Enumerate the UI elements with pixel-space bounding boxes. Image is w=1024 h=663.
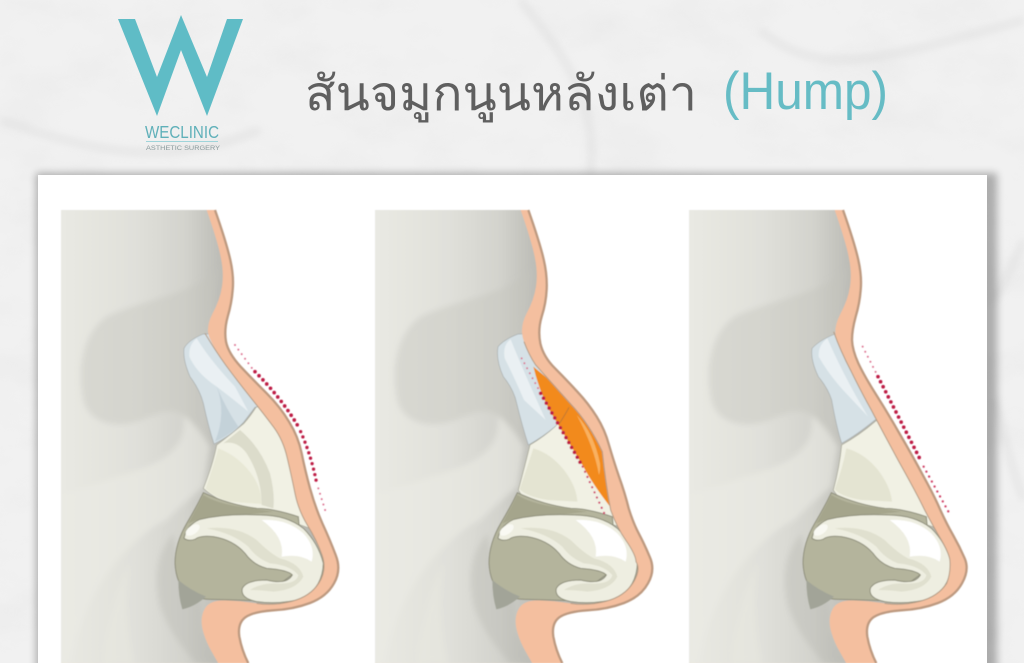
logo wordmark: WECLINIC [145, 122, 219, 142]
skin outline [528, 210, 652, 663]
logo rule [146, 141, 218, 142]
internal structures [709, 298, 950, 658]
inner skin line [834, 332, 950, 604]
nostril and alar cartilage [175, 493, 323, 609]
inner skin line [205, 333, 324, 604]
face interior [375, 210, 638, 663]
skin fill [375, 210, 652, 663]
panel: nose before, with hump [61, 210, 338, 663]
logo mark: W [118, 15, 243, 116]
logo: WeClinic [118, 15, 243, 152]
dotted line: hump curve [235, 345, 327, 515]
face interior [689, 210, 950, 663]
white card panel [38, 175, 987, 663]
internal structures [395, 298, 638, 657]
nasal bone [811, 334, 876, 444]
cartilage [832, 421, 933, 526]
title: Thai text: สันจมูกนูนหลังเต่า [305, 68, 697, 123]
panel: nose during, hump marked for removal [375, 210, 652, 663]
inner skin line [524, 342, 638, 604]
face shading [395, 298, 524, 657]
dotted line: straight profile [863, 347, 949, 513]
internal structures [81, 298, 324, 658]
dotted line: cut line [522, 358, 605, 515]
skin fill [689, 210, 967, 663]
logo tagline: ASTHETIC SURGERY [146, 146, 220, 152]
orange hump area [533, 367, 614, 512]
nasal bone [183, 334, 258, 444]
face shading [709, 298, 838, 658]
card shadow [36, 173, 997, 663]
nostril and alar cartilage [803, 493, 951, 609]
skin outline [843, 210, 967, 663]
skin outline [215, 210, 338, 663]
cartilage [518, 424, 617, 526]
title [305, 62, 888, 123]
face shading [81, 298, 210, 658]
title: Hump: (Hump) [723, 62, 888, 121]
face interior [61, 210, 324, 663]
nostril and alar cartilage [489, 493, 637, 609]
skin fill [61, 210, 338, 663]
nasal bone [497, 334, 558, 445]
cartilage [202, 406, 308, 528]
panel: nose after, straight profile [689, 210, 967, 663]
